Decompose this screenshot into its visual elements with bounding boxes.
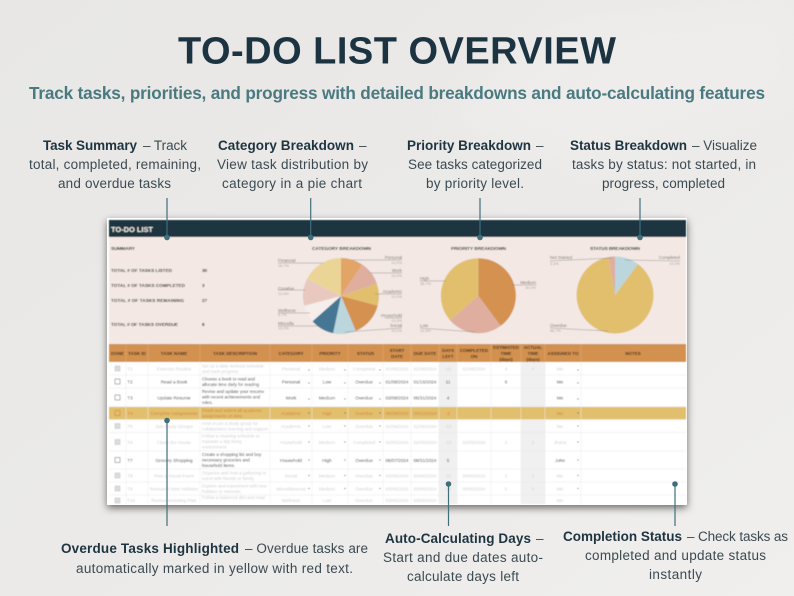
pointer: overdue tasks: [164, 418, 170, 526]
chart: category breakdown: Household: [381, 313, 403, 318]
row T9: T9: [127, 486, 133, 492]
spreadsheet panel: [107, 218, 687, 505]
row T3: Revise and update your resume: [202, 389, 265, 394]
row T3: Update Resume: [157, 396, 191, 400]
subtitle: Track tasks, priorities, and progress with detailed breakdowns and auto-calculating features: [29, 83, 765, 103]
chart: status breakdown: [550, 246, 681, 334]
row T9: 0: [532, 486, 535, 492]
row T6: Household: [280, 440, 302, 445]
callout: auto-calculating days: Auto-Calculating Days: [385, 531, 531, 546]
callout: auto-calculating days: –: [536, 531, 544, 546]
row T1: Personal: [282, 366, 300, 372]
callout: completion status: – Check tasks as: [687, 529, 788, 544]
chart: status breakdown: 86.7%: [550, 329, 561, 333]
row T2: 01/08/2024: [386, 380, 409, 384]
table header: ESTIMATED: [493, 345, 520, 350]
chart: category breakdown: 10.0%: [391, 274, 403, 278]
callout: task summary: total, completed, remaining,: [29, 157, 201, 172]
panel: summary: 27: [202, 298, 208, 303]
row T7: [115, 452, 565, 468]
row T1: Set up a daily workout schedule: [202, 364, 265, 368]
row T4 highlighted: Me: [557, 411, 564, 416]
row T9: Me: [557, 486, 564, 492]
chart: category breakdown: Financial: [278, 258, 296, 263]
row T10: Follow a balanced diet and meal: [202, 495, 265, 500]
row T1: [115, 364, 564, 374]
row T9: Miscellaneous: [276, 486, 306, 492]
row T1: Medium: [319, 366, 335, 372]
callout: auto-calculating days: [383, 531, 544, 584]
callout: category breakdown: Category Breakdown: [218, 138, 354, 153]
row T5: collaborative learning and support: [202, 426, 269, 432]
callout: priority breakdown: See tasks categorized: [408, 157, 542, 172]
row T4 highlighted: assignments on time.: [202, 414, 244, 418]
pointer: task summary: [164, 198, 170, 240]
row T10: 03/06/2024: [414, 498, 437, 503]
highlighted overdue row: [109, 407, 686, 420]
row T3: Medium: [319, 396, 335, 400]
row T9: hobbies or interests.: [202, 489, 242, 494]
callout: overdue tasks highlighted: [61, 541, 368, 576]
callout: priority breakdown: –: [536, 138, 544, 153]
panel: summary: TOTAL # OF TASKS REMAINING: [111, 298, 184, 303]
chart: priority breakdown: 40.0%: [525, 286, 537, 290]
chart: category breakdown: CATEGORY BREAKDOWN: [312, 246, 372, 252]
row T10: Me: [557, 498, 564, 503]
table header: DONE: [111, 351, 124, 356]
row T2: Overdue: [355, 380, 373, 384]
row T4 highlighted: Academic: [281, 411, 302, 416]
row T4 highlighted: Overdue: [355, 411, 373, 416]
row T2: Choose a book to read and: [202, 376, 256, 382]
row T9: 03/06/2024: [386, 486, 409, 492]
chart: category breakdown: 10.0%: [391, 329, 403, 333]
row T3: with recent achievements and: [202, 394, 261, 400]
table header: [109, 344, 686, 362]
title: TO-DO LIST OVERVIEW: [178, 30, 616, 72]
row T5: [115, 421, 564, 432]
row T9: -10: [445, 486, 452, 492]
callout: priority breakdown: [407, 138, 544, 191]
chart: category breakdown: [278, 246, 403, 334]
row T1: 01/06/2024: [462, 366, 486, 372]
row T7: necessary groceries and: [202, 458, 250, 462]
row T2: 6: [505, 380, 508, 384]
row T10: T10: [127, 498, 135, 503]
row T9: Medium: [319, 486, 335, 492]
row T1: Me: [557, 366, 564, 372]
callout: overdue tasks highlighted: automatically marked in yellow with red text.: [76, 561, 353, 576]
chart: status breakdown: Completed: [659, 255, 681, 260]
row T4 highlighted: Finish and submit all academic: [202, 408, 263, 413]
row T2: Low: [323, 380, 332, 384]
row T10: [115, 495, 564, 503]
dashboard background: [109, 237, 686, 344]
table header: TASK DESCRIPTION: [213, 351, 257, 356]
chart: category breakdown: Personal: [385, 255, 402, 260]
row T3: 4: [447, 396, 450, 400]
callout: status breakdown: – Visualize: [692, 138, 757, 153]
table header: ASSIGNED TO: [548, 351, 579, 356]
row T6: maintain a tidy living: [202, 439, 242, 444]
row T7: household items.: [202, 463, 235, 468]
row T6: T6: [127, 440, 133, 445]
row T2: Read a Book: [161, 380, 188, 384]
pointer: completion status: [672, 481, 678, 526]
pointer: priority breakdown: [477, 198, 483, 240]
callout: completion status: instantly: [649, 567, 702, 582]
callout: overdue tasks highlighted: – Overdue tasks are: [245, 541, 368, 556]
table header: COMPLETED: [460, 348, 489, 353]
callout: overdue tasks highlighted: Overdue Tasks Highlighted: [61, 541, 239, 556]
row T2: 11: [446, 380, 451, 384]
row T6: [115, 434, 567, 450]
callout: category breakdown: [217, 138, 368, 191]
table header: DUE DATE: [414, 351, 436, 356]
row T6: Clean the House: [157, 440, 192, 445]
chart: category breakdown: 10.0%: [391, 261, 403, 265]
callout: status breakdown: [570, 138, 757, 191]
row T10: Review Investing Plan: [151, 498, 197, 503]
row T8: -10: [445, 474, 452, 478]
table body: [109, 362, 686, 504]
chart: priority breakdown: Low: [420, 323, 429, 328]
callout: category breakdown: category in a pie chart: [222, 176, 362, 191]
row T9: 00/00/2024: [462, 486, 486, 492]
row T8: 2: [505, 474, 508, 478]
row T4 highlighted: 03/22/2024: [414, 411, 437, 416]
row T7: Overdue: [355, 458, 373, 463]
row T1: T1: [127, 366, 133, 372]
chart: category breakdown: Wellness: [278, 308, 297, 313]
row T3: Overdue: [355, 396, 373, 400]
row T8: 03/06/2024: [386, 474, 409, 478]
table header: START: [390, 348, 405, 353]
callout: task summary: [29, 138, 201, 191]
row T6: 02/05/2024: [414, 440, 437, 445]
chart: priority breakdown: PRIORITY BREAKDOWN: [451, 246, 507, 252]
table header: ACTUAL: [524, 345, 542, 350]
chart: category breakdown: 13.3%: [278, 292, 289, 296]
callout: status breakdown: Status Breakdown: [570, 138, 687, 153]
row T5: T5: [127, 424, 133, 429]
row T8: 2: [532, 474, 535, 478]
table header: PRIORITY: [319, 351, 341, 356]
row T8: Plan a Social Event: [154, 474, 195, 478]
chart: category breakdown: Creative: [278, 286, 295, 291]
chart: priority breakdown: 36.7%: [420, 282, 431, 286]
row T3: Me: [557, 396, 564, 400]
row T4 highlighted: T4: [127, 411, 133, 416]
row T4 highlighted: 06/09/2024: [386, 411, 409, 416]
table header: TIME: [528, 351, 538, 356]
table header: (days): [499, 357, 513, 362]
chart: category breakdown: Work: [392, 268, 403, 273]
row T2: T2: [127, 380, 133, 384]
row T8: 03/06/2024: [414, 474, 437, 478]
callout: completion status: Completion Status: [563, 529, 682, 544]
chart: status breakdown: Not Started: [550, 255, 573, 260]
row T1: 4: [532, 366, 535, 372]
row T4 highlighted: [115, 408, 564, 418]
row T6: environment.: [202, 444, 227, 450]
callout: auto-calculating days: Start and due dates auto-: [383, 550, 543, 565]
table header: (days): [526, 357, 540, 362]
table header: CATEGORY: [278, 351, 304, 356]
chart: priority breakdown: Medium: [520, 280, 536, 285]
row T3: 03/08/2024: [386, 396, 409, 400]
row T8: Overdue: [355, 474, 373, 478]
chart: status breakdown: Overdue: [550, 323, 567, 328]
chart: category breakdown: Academic: [383, 289, 403, 294]
row T10: Wellness: [282, 498, 301, 503]
chart: category breakdown: 13.3%: [391, 319, 403, 323]
row T7: Household: [280, 458, 302, 463]
row T3: roles.: [202, 400, 213, 405]
row T10: Overdue: [355, 498, 373, 503]
row T5: 01/06/2024: [386, 424, 409, 429]
row T10: 03/06/2024: [386, 498, 409, 503]
chart: priority breakdown: 23.3%: [420, 329, 431, 333]
row T2: 01/15/2024: [414, 380, 437, 384]
row T7: John: [555, 458, 565, 463]
row T2: Personal: [282, 380, 300, 384]
row T9: Overdue: [355, 486, 373, 492]
pointer: auto-calculating days: [446, 481, 451, 526]
row T2: [115, 376, 564, 387]
callout: completion status: [563, 529, 788, 582]
row T7: Create a shopping list and buy: [202, 452, 262, 457]
row T5: 01/06/2024: [414, 424, 437, 429]
row T6: Jhona: [554, 440, 567, 445]
panel: summary: 30: [202, 268, 208, 273]
panel: summary: [111, 246, 208, 327]
table header: TIME: [501, 351, 511, 356]
panel: summary: TOTAL # OF TASKS LISTED: [111, 268, 173, 273]
row T8: Organize and host a gathering or: [202, 470, 267, 476]
panel: summary: 3: [202, 283, 205, 288]
row T8: 00/00/2024: [462, 474, 486, 478]
row T8: event with friends or family.: [202, 476, 255, 481]
row T7: 08/31/2024: [414, 458, 437, 463]
row T1: 4: [505, 366, 508, 372]
chart: status breakdown: STATUS BREAKDOWN: [590, 246, 641, 252]
row T8: Social: [285, 474, 297, 478]
callout: category breakdown: View task distribution by: [217, 157, 368, 172]
callout: task summary: Task Summary: [43, 138, 137, 153]
row T7: High: [322, 458, 332, 463]
pointer: status breakdown: [637, 198, 643, 240]
chart: category breakdown: Miscella: [278, 321, 294, 326]
panel: summary: TOTAL # OF TASKS COMPLETED: [111, 283, 186, 288]
sheet header bar: [109, 220, 686, 237]
row T5: Low: [323, 424, 332, 429]
chart: category breakdown: 10.0%: [278, 326, 289, 330]
callout: status breakdown: progress, completed: [602, 176, 725, 191]
row T1: Exercise Routine: [157, 366, 192, 372]
row T5: Overdue: [355, 424, 373, 429]
row T8: [115, 470, 564, 481]
row T2: allocate time daily for reading: [202, 382, 260, 387]
sheet header bar: TO-DO LIST: [111, 225, 153, 234]
chart: category breakdown: 16.7%: [278, 264, 289, 268]
row T7: T7: [127, 458, 133, 463]
pointer: category breakdown: [308, 198, 314, 240]
callout: auto-calculating days: calculate days left: [407, 569, 519, 584]
row T7: 06/07/2024: [386, 458, 409, 463]
chart: category breakdown: 10.0%: [391, 295, 403, 299]
row T9: 0: [505, 486, 508, 492]
callout: priority breakdown: Priority Breakdown: [407, 138, 531, 153]
callout: status breakdown: tasks by status: not started, in: [572, 157, 756, 172]
callout: priority breakdown: by priority level.: [426, 176, 524, 191]
row T4 highlighted: High: [322, 411, 332, 416]
row T3: [115, 389, 564, 405]
table header: TASK NAME: [161, 351, 187, 356]
table header: DATE: [391, 354, 403, 359]
row T6: Follow a cleaning schedule to: [202, 434, 260, 438]
callout: category breakdown: –: [359, 138, 367, 153]
chart: priority breakdown: High: [420, 276, 430, 281]
chart: category breakdown: Social: [390, 323, 402, 328]
chart: priority breakdown: [420, 246, 537, 333]
row T8: T8: [127, 474, 133, 478]
row T6: 02/05/2024: [386, 440, 409, 445]
chart: status breakdown: 3.3%: [550, 262, 559, 266]
row T5: Academic: [281, 424, 302, 429]
row T1: 01/06/2024: [386, 366, 409, 372]
panel: summary: TOTAL # OF TASKS OVERDUE: [111, 322, 178, 327]
row T6: 2: [532, 440, 535, 445]
row T7: 5: [447, 458, 450, 463]
row T1: 01/06/2024: [414, 366, 437, 372]
callout: completion status: completed and update status: [585, 548, 766, 563]
row T2: Me: [557, 380, 564, 384]
table header: DAYS: [442, 348, 454, 353]
row T5: Me: [557, 424, 564, 429]
row T6: Completed: [353, 440, 376, 445]
table header: NOTES: [625, 351, 641, 356]
row T5: Join Study Groups: [155, 424, 194, 429]
callout: task summary: – Track: [143, 138, 187, 153]
row T9: 03/06/2024: [414, 486, 437, 492]
row T3: 05/31/2024: [414, 396, 437, 400]
dropdown arrows: [308, 370, 579, 489]
row T8: Medium: [319, 474, 335, 478]
row T7: Grocery Shopping: [155, 458, 193, 463]
panel: summary: 8: [202, 322, 205, 327]
table header: ON: [471, 354, 477, 359]
row T8: Me: [557, 474, 564, 478]
row T4 highlighted: -2: [446, 411, 450, 416]
row T5: Find or join a study group for: [202, 421, 258, 426]
row T3: Work: [286, 396, 297, 400]
table header: LEFT: [442, 354, 454, 359]
row T6: 02/05/2024: [462, 440, 486, 445]
table header: TASK ID: [128, 351, 147, 356]
row T1: and track progress: [202, 369, 239, 374]
chart: category breakdown: 6.7%: [278, 313, 287, 317]
panel: summary: SUMMARY: [111, 246, 136, 252]
row T9: Explore and experiment with new: [202, 484, 268, 488]
row T4 highlighted: Complete Assignments: [151, 411, 198, 416]
row T3: T3: [127, 396, 133, 400]
row T10: Low: [323, 498, 332, 503]
row T6: -10: [445, 440, 452, 445]
row T6: Medium: [319, 440, 335, 445]
row T9: [115, 484, 564, 494]
row T6: 2: [505, 440, 508, 445]
table header: STATUS: [357, 351, 374, 356]
row T9: Research New Hobbies: [150, 486, 199, 492]
chart: status breakdown: 10.0%: [669, 262, 681, 266]
row T5: -10: [445, 424, 452, 429]
row T1: Completed: [353, 366, 376, 372]
row T1: -10: [445, 366, 452, 372]
callout: task summary: and overdue tasks: [58, 176, 171, 191]
